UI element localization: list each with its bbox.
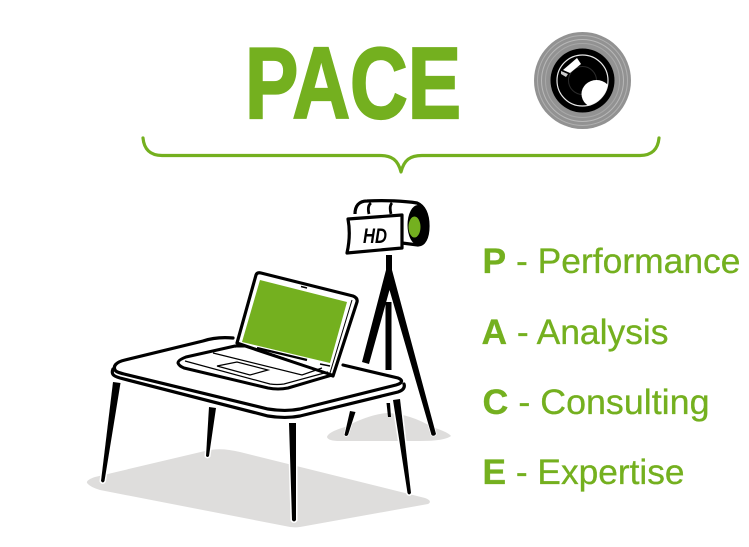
table (101, 338, 411, 522)
brace (143, 138, 659, 172)
table top (114, 338, 402, 410)
table legs (101, 382, 411, 522)
laptop base (178, 346, 332, 389)
tripod shadow (327, 413, 451, 441)
lens: green (408, 216, 420, 238)
HD text: HD (363, 225, 387, 248)
title: PACE (245, 28, 461, 140)
P row: P - Performance (482, 242, 740, 281)
laptop screen (242, 280, 347, 363)
E row: E - Expertise (482, 453, 684, 492)
HD label panel (347, 215, 402, 253)
laptop lid (237, 273, 357, 376)
webcam (301, 286, 307, 288)
list of PACE meanings (482, 242, 740, 492)
camera on tripod (344, 201, 436, 436)
laptop (178, 273, 357, 389)
camera body (355, 201, 428, 245)
desk shadow (87, 449, 430, 527)
A row: A - Analysis (482, 313, 668, 352)
tripod (344, 255, 436, 436)
icon: camera lens (534, 32, 631, 129)
C row: C - Consulting (482, 383, 710, 422)
